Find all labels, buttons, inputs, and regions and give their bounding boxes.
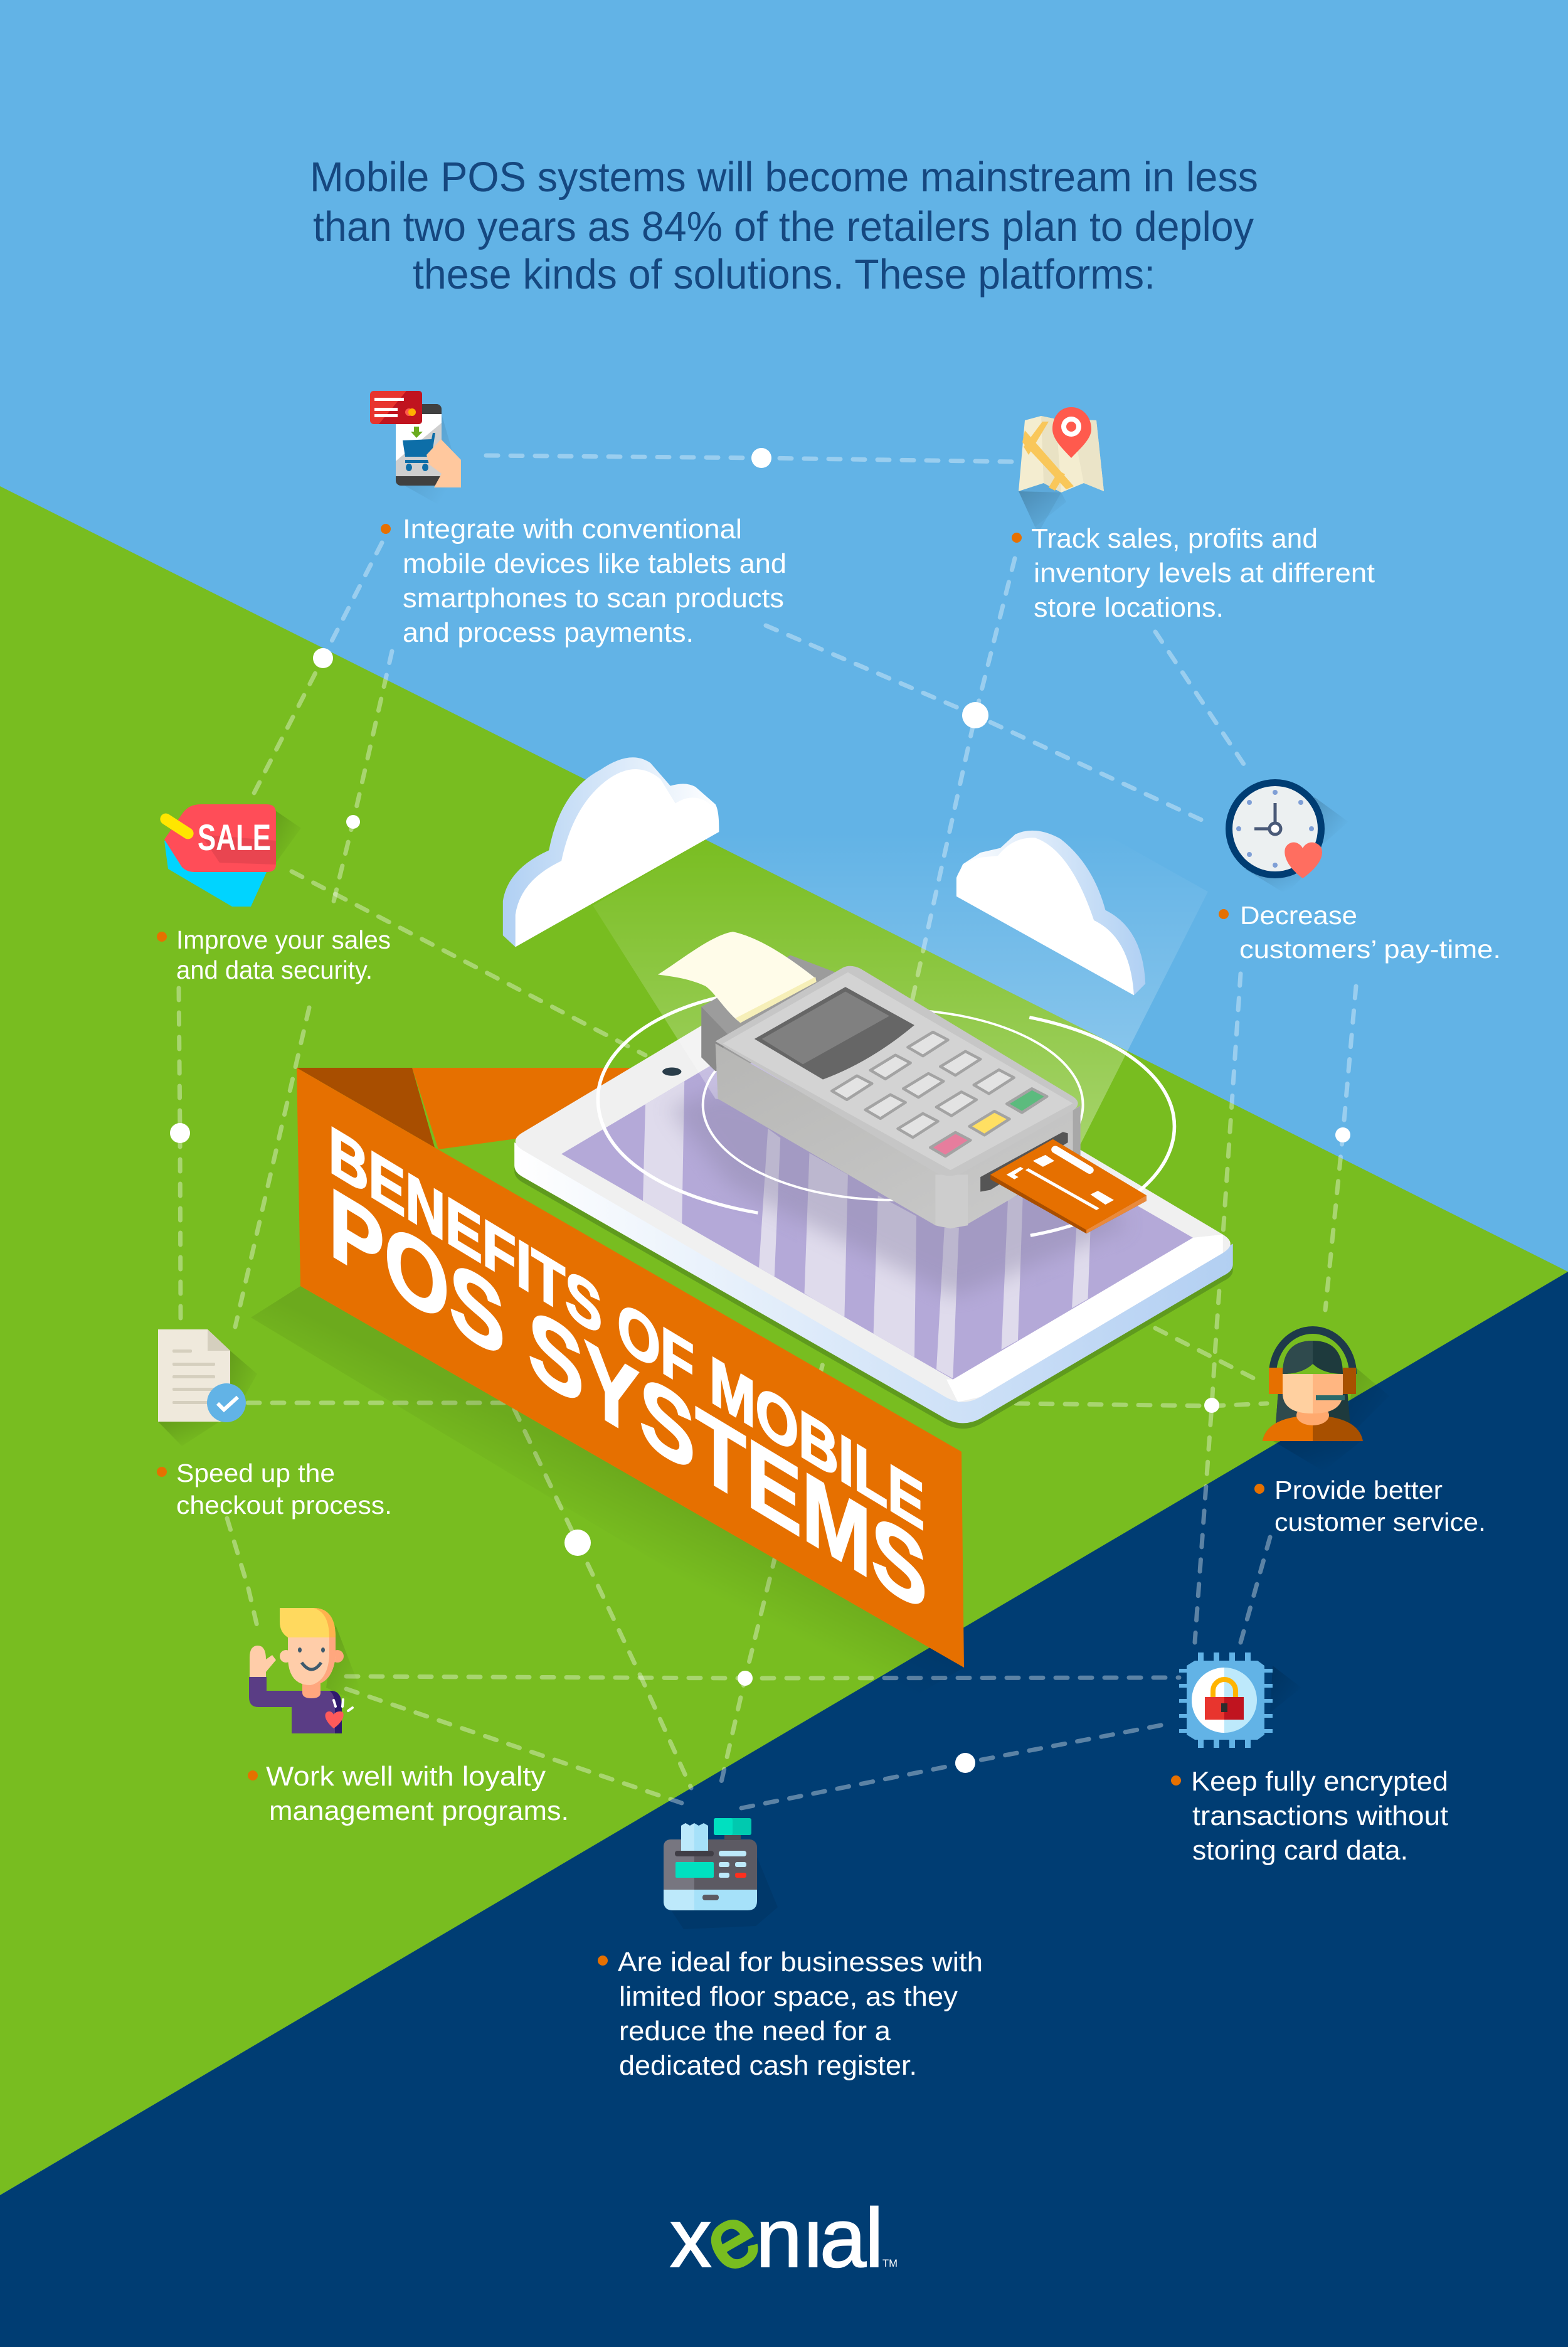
text: better customer service [1254,1476,1486,1536]
text: decrease pay-time [1219,901,1501,964]
text: integrate with mobile devices: and process payments. [403,617,694,648]
text: encrypted transactions: storing card data. [1192,1835,1408,1866]
text: loyalty programs: Work well with loyalty [266,1761,546,1792]
text: loyalty programs: management programs. [269,1796,569,1826]
text: speed up checkout: checkout process. [176,1491,392,1519]
text: encrypted transactions [1171,1766,1448,1866]
logo: xenial [670,2187,898,2291]
text: improve sales: and data security. [176,955,373,984]
text: better customer service: customer service. [1274,1508,1486,1536]
text: floor space: Are ideal for businesses with [618,1947,983,1977]
logo: xenial: e [687,2187,775,2291]
icon: customer service agent [1263,1330,1389,1471]
logo: xenial: TM [882,2257,898,2269]
network nodes [170,448,1350,1773]
icon: encrypted chip with lock [1179,1652,1301,1748]
title: these kinds of solutions. These platforms: [413,251,1155,298]
text: integrate with mobile devices: mobile devices like tablets and [403,548,787,579]
text: integrate with mobile devices: smartphones to scan products [403,583,784,614]
dashed network connectors [179,455,1356,1808]
text: integrate with mobile devices [381,514,787,648]
text: decrease pay-time: Decrease [1240,901,1357,930]
icon: sale tag: SALE [198,817,271,858]
icon: happy customer [249,1608,367,1733]
cloud left [503,757,719,947]
text: decrease pay-time: customers’ pay-time. [1239,935,1501,964]
tablet [514,1025,1233,1429]
text: track sales [1012,523,1375,623]
text: better customer service: Provide better [1274,1476,1443,1504]
central illustration: tablet, clouds, card reader [503,757,1233,1429]
text: integrate with mobile devices: Integrate with conventional [403,514,742,545]
card reader [658,932,1147,1233]
banner heading: POS SYSTEMS [329,1166,927,1634]
icon: cash register [664,1818,778,1929]
text: floor space: dedicated cash register. [619,2050,917,2081]
logo: xenial: nıal [756,2192,884,2285]
icon: document with check [158,1329,257,1446]
title [310,154,1258,298]
banner heading: BENEFITS OF MOBILE [329,1112,924,1545]
text: track sales: inventory levels at different [1034,558,1375,588]
text: floor space [598,1947,983,2081]
holographic rings [598,998,1174,1235]
text: loyalty programs [248,1761,569,1826]
banner back fold and shadow [251,1068,964,1706]
icon: phone with shopping cart and payment card [370,391,461,505]
light beam [593,832,1208,1149]
text: improve sales: Improve your sales [176,925,391,954]
text: track sales: store locations. [1034,592,1224,623]
text: encrypted transactions: transactions without [1192,1801,1448,1831]
title: Mobile POS systems will become mainstream in less [310,154,1258,201]
text: floor space: reduce the need for a [619,2016,891,2046]
icon: clock with heart [1226,779,1348,894]
banner [297,1068,964,1668]
cloud right [956,831,1145,995]
text: floor space: limited floor space, as they [619,1981,958,2012]
text: speed up checkout [157,1459,392,1519]
title: than two years as 84% of the retailers plan to deploy [313,203,1254,250]
icon: sale tag [158,804,301,907]
icon: map with location pin [1019,407,1104,533]
text: track sales: Track sales, profits and [1031,523,1318,554]
text: speed up checkout: Speed up the [176,1459,335,1487]
text: encrypted transactions: Keep fully encrypted [1191,1766,1448,1797]
logo: xenial: x [670,2192,711,2285]
text: improve sales [157,925,391,984]
